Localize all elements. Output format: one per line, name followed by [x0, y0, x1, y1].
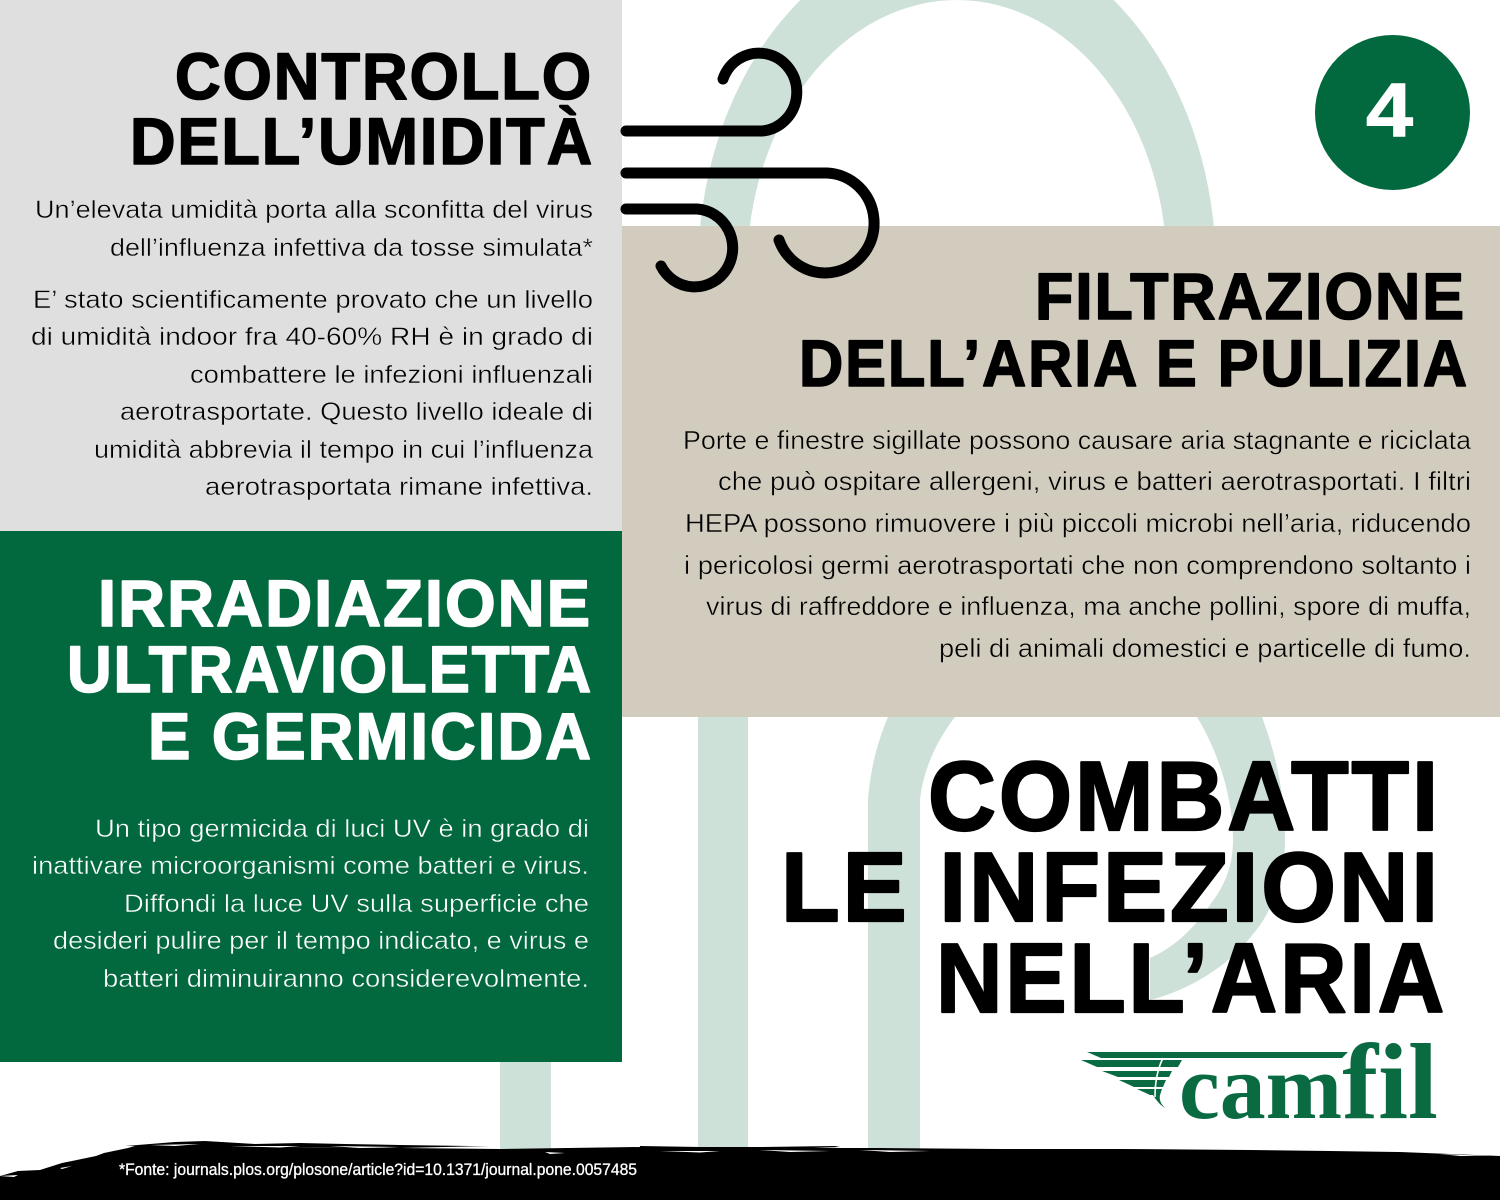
- background arches: [500, 0, 1285, 1150]
- logo wordmark: camfil: [1179, 1023, 1438, 1142]
- main title: LE INFEZIONI: [781, 832, 1441, 942]
- text: irradiazione body: batteri diminuiranno considerevolmente.: [103, 965, 589, 993]
- heading: irradiazione ultravioletta e germicida: [67, 566, 593, 773]
- heading: controllo dell'umidità: DELL’UMIDITÀ: [130, 104, 594, 178]
- text: filtrazione body: [683, 425, 1472, 663]
- heading: irradiazione ultravioletta e germicida: ULTRAVIOLETTA: [67, 632, 593, 706]
- text: irradiazione body: inattivare microorganismi come batteri e virus.: [32, 852, 589, 880]
- main title: [781, 741, 1447, 1033]
- text: umidità body: E’ stato scientificamente provato che un livello: [33, 286, 593, 314]
- main title: COMBATTI: [928, 741, 1441, 851]
- text: umidità body: aerotrasportata rimane infettiva.: [205, 473, 593, 501]
- text: irradiazione body: Diffondi la luce UV sulla superficie che: [124, 890, 589, 918]
- text: umidità body: di umidità indoor fra 40-60% RH è in grado di: [31, 323, 593, 351]
- badge: number 4: [1315, 35, 1470, 190]
- heading: filtrazione dell'aria e pulizia: FILTRAZIONE: [1035, 259, 1466, 333]
- panel: controllo dell'umidità: [0, 0, 622, 531]
- text: irradiazione body: Un tipo germicida di luci UV è in grado di: [95, 815, 589, 843]
- panel: filtrazione dell'aria: [622, 226, 1500, 717]
- text: filtrazione body: Porte e finestre sigillate possono causare aria stagnante e riciclata: [683, 425, 1472, 455]
- text: umidità body: [31, 196, 593, 501]
- text: umidità body: Un’elevata umidità porta alla sconfitta del virus: [35, 196, 593, 224]
- logo wing: [1081, 1052, 1348, 1108]
- heading: controllo dell'umidità: CONTROLLO: [175, 39, 593, 113]
- text: filtrazione body: HEPA possono rimuovere i più piccoli microbi nell’aria, riducendo: [685, 508, 1471, 538]
- text: filtrazione body: che può ospitare allergeni, virus e batteri aerotrasportati. I filtri: [718, 466, 1471, 496]
- footer source text: *Fonte: journals.plos.org/plosone/article?id=10.1371/journal.pone.0057485: [119, 1161, 637, 1179]
- text: filtrazione body: virus di raffreddore e influenza, ma anche pollini, spore di muffa,: [706, 591, 1471, 621]
- heading: filtrazione dell'aria e pulizia: [799, 259, 1469, 400]
- text: irradiazione body: [32, 815, 589, 993]
- main title: NELL’ARIA: [936, 923, 1447, 1033]
- text: umidità body: dell’influenza infettiva da tosse simulata*: [110, 234, 593, 262]
- text: umidità body: umidità abbrevia il tempo in cui l’influenza: [94, 436, 593, 464]
- heading: irradiazione ultravioletta e germicida: E GERMICIDA: [148, 699, 593, 773]
- icon: wind: [626, 53, 874, 287]
- text: irradiazione body: desideri pulire per il tempo indicato, e virus e: [53, 927, 589, 955]
- panel: irradiazione ultravioletta: [0, 531, 622, 1062]
- heading: controllo dell'umidità: [130, 39, 594, 178]
- text: filtrazione body: peli di animali domestici e particelle di fumo.: [939, 633, 1471, 663]
- text: umidità body: aerotrasportate. Questo livello ideale di: [120, 398, 593, 426]
- heading: irradiazione ultravioletta e germicida: IRRADIAZIONE: [98, 566, 592, 640]
- text: umidità body: combattere le infezioni influenzali: [190, 361, 593, 389]
- heading: filtrazione dell'aria e pulizia: DELL’ARIA E PULIZIA: [799, 326, 1469, 400]
- text: filtrazione body: i pericolosi germi aerotrasportati che non comprendono soltanto i: [684, 550, 1471, 580]
- logo: camfil: [1081, 1023, 1438, 1142]
- badge: number 4: 4: [1366, 68, 1413, 153]
- footer brush band: [0, 1141, 1500, 1200]
